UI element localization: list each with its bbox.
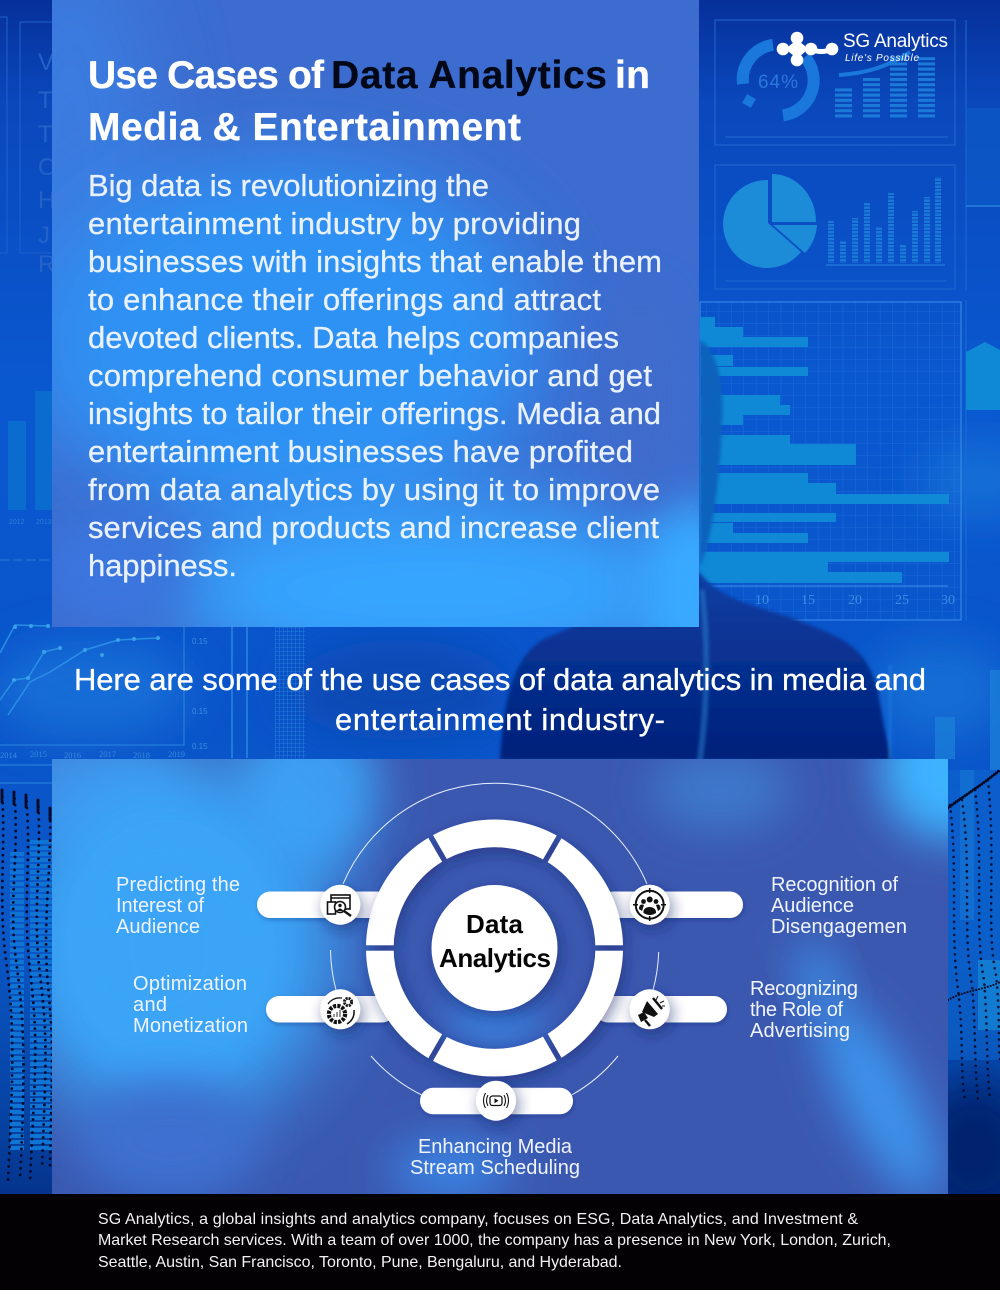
center disc: Data bbox=[466, 909, 524, 939]
label: enhancing media stream scheduling: Enhancing Media bbox=[418, 1136, 573, 1158]
title: in bbox=[615, 54, 650, 97]
decorative dot waves, right bbox=[948, 770, 1000, 1100]
dashboard: left edge charts: J bbox=[38, 222, 50, 249]
title: Media & Entertainment bbox=[88, 106, 521, 149]
dashboard: left line chart: 0.15 bbox=[192, 637, 208, 646]
dashboard: left edge charts: V bbox=[38, 49, 54, 76]
footer text: SG Analytics, a global insights and analytics company, focuses on ESG, Data Analytics, and Investment & bbox=[98, 1211, 858, 1228]
label: predicting the interest of audience: Interest of bbox=[116, 895, 204, 917]
intro paragraph: insights to tailor their offerings. Media and bbox=[88, 396, 661, 431]
label: recognizing the role of advertising: Recognizing bbox=[750, 978, 858, 1000]
dashboard: right edge charts bbox=[935, 20, 1000, 770]
dashboard: left edge charts bbox=[0, 17, 57, 560]
label: recognition of audience disengagement: Audience bbox=[771, 895, 854, 917]
dashboard: donut and bar widget bbox=[715, 20, 955, 145]
logo: SG Analytics: Life's Possible bbox=[845, 53, 919, 64]
intro paragraph: to enhance their offerings and attract bbox=[88, 282, 601, 317]
center disc bbox=[432, 885, 558, 1011]
dashboard: horizontal bar chart: 25 bbox=[895, 593, 909, 608]
label: optimization and monetization: and bbox=[133, 994, 167, 1016]
subheading: entertainment industry- bbox=[335, 702, 665, 737]
dashboard: horizontal bar chart bbox=[700, 302, 961, 620]
dashboard: pie and column widget bbox=[715, 165, 955, 289]
dashboard: left line chart: 2014 bbox=[0, 750, 18, 760]
label: recognition of audience disengagement: Recognition of bbox=[771, 874, 898, 896]
central ring bbox=[380, 833, 609, 1063]
connector arcs bbox=[330, 783, 659, 1095]
footer text: Seattle, Austin, San Francisco, Toronto, Pune, Bengaluru, and Hyderabad. bbox=[98, 1254, 622, 1271]
dashboard: left edge charts: 2013 bbox=[36, 519, 52, 526]
logo: SG Analytics: SG Analytics bbox=[843, 31, 948, 52]
dashboard: left line chart: 2018 bbox=[133, 750, 150, 760]
intro paragraph bbox=[88, 168, 662, 583]
intro paragraph: devoted clients. Data helps companies bbox=[88, 320, 619, 355]
background: woman's hair and shoulders bbox=[500, 340, 892, 760]
subheading bbox=[74, 662, 926, 737]
dashboard: left edge charts: T bbox=[38, 87, 53, 114]
dashboard: left line chart: 2019 bbox=[168, 749, 185, 759]
label: predicting the interest of audience bbox=[116, 874, 240, 938]
label: enhancing media stream scheduling: Stream Scheduling bbox=[410, 1157, 580, 1179]
title: Use Cases of bbox=[88, 54, 325, 97]
footer text bbox=[98, 1211, 891, 1271]
label: recognizing the role of advertising: Advertising bbox=[750, 1020, 850, 1042]
intro paragraph: businesses with insights that enable them bbox=[88, 244, 662, 279]
title: Data Analytics bbox=[331, 54, 607, 97]
label: recognizing the role of advertising bbox=[750, 978, 858, 1042]
label: recognition of audience disengagement: Disengagemen bbox=[771, 916, 907, 938]
label: optimization and monetization: Monetization bbox=[133, 1015, 248, 1037]
dashboard: left edge charts: R bbox=[38, 251, 55, 278]
label: optimization and monetization bbox=[133, 973, 248, 1037]
dashboard: horizontal bar chart: 30 bbox=[941, 593, 955, 608]
pills bbox=[257, 892, 743, 1114]
dashboard: left edge charts: 2012 bbox=[9, 519, 25, 526]
intro paragraph: entertainment businesses have profited bbox=[88, 434, 633, 469]
icon: gears and chart bbox=[320, 989, 360, 1029]
dashboard: left line chart: 0.15 bbox=[192, 707, 208, 716]
label: enhancing media stream scheduling bbox=[410, 1136, 580, 1179]
icon: audience search bbox=[320, 885, 360, 925]
panel: data analytics diagram bbox=[52, 759, 948, 1194]
intro paragraph: entertainment industry by providing bbox=[88, 206, 581, 241]
icon: media stream bbox=[476, 1081, 516, 1121]
dashboard: left line chart: 2016 bbox=[64, 750, 81, 760]
dashboard: left line chart: 2015 bbox=[30, 749, 47, 759]
label: optimization and monetization: Optimization bbox=[133, 973, 247, 995]
intro paragraph: services and products and increase client bbox=[88, 510, 659, 545]
logo: SG Analytics bbox=[777, 31, 948, 66]
intro paragraph: happiness. bbox=[88, 548, 237, 583]
dashboard: horizontal bar chart: 10 bbox=[755, 593, 769, 608]
dashboard: horizontal bar chart: 15 bbox=[801, 593, 815, 608]
footer text: Market Research services. With a team of over 1000, the company has a presence in New York, London, Zurich, bbox=[98, 1232, 891, 1249]
intro paragraph: from data analytics by using it to improve bbox=[88, 472, 660, 507]
subheading: Here are some of the use cases of data analytics in media and bbox=[74, 662, 926, 697]
footer bbox=[0, 1194, 1000, 1290]
label: predicting the interest of audience: Predicting the bbox=[116, 874, 240, 896]
label: recognizing the role of advertising: the Role of bbox=[750, 999, 843, 1021]
dashboard: horizontal bar chart: 20 bbox=[848, 593, 862, 608]
intro paragraph: Big data is revolutionizing the bbox=[88, 168, 489, 203]
dashboard: left line chart bbox=[0, 624, 305, 783]
panel: intro bbox=[52, 0, 699, 627]
icon: audience target bbox=[630, 885, 670, 925]
center disc: Analytics bbox=[439, 943, 551, 973]
dashboard: left line chart: 0.15 bbox=[192, 742, 208, 751]
label: recognition of audience disengagement bbox=[771, 874, 907, 938]
dashboard: left edge charts: T bbox=[38, 121, 53, 148]
intro paragraph: comprehend consumer behavior and get bbox=[88, 358, 652, 393]
dashboard: left edge charts: H bbox=[38, 187, 55, 214]
dashboard: left edge charts: O bbox=[38, 154, 57, 181]
dashboard: left line chart: 2017 bbox=[99, 749, 116, 759]
decorative dot waves, left bbox=[2, 790, 52, 1180]
label: predicting the interest of audience: Audience bbox=[116, 916, 200, 938]
icon: megaphone bbox=[630, 989, 670, 1029]
dashboard: donut and bar widget: 64% bbox=[758, 72, 798, 93]
background: lower side columns bbox=[10, 770, 1000, 1150]
